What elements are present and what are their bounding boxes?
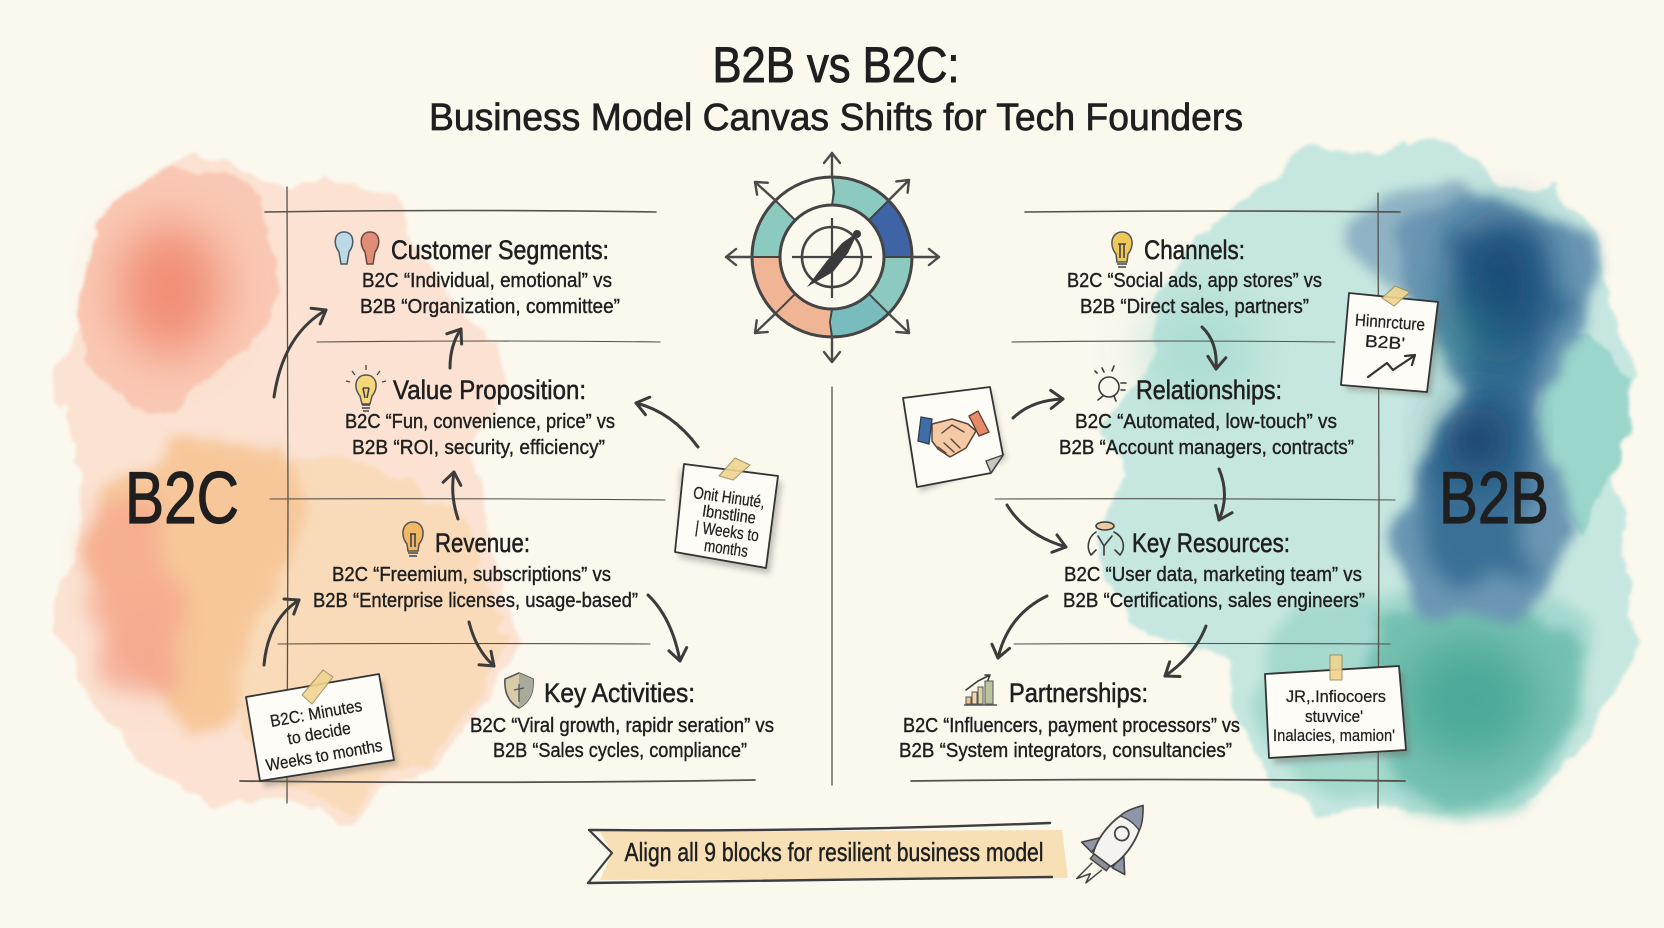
block: Partnerships: B2B “System integrators, consultancies” — [899, 739, 1232, 762]
block: Key Activities: B2C “Viral growth, rapidr seration” vs — [470, 714, 774, 737]
title: Business Model Canvas Shifts for Tech Founders — [429, 97, 1243, 139]
block: Key Activities: Key Activities: — [544, 678, 695, 708]
banner — [588, 823, 1068, 883]
block: Partnerships: B2C “Influencers, payment processors” vs — [903, 714, 1240, 737]
block: Customer Segments: B2B “Organization, committee” — [360, 295, 620, 318]
sticky note: garbled partnerships: JR,.Infiocoers — [1286, 687, 1386, 706]
block: Value Proposition: Value Proposition: — [393, 375, 586, 405]
flow arrows — [264, 310, 1224, 676]
icon: rocket — [1062, 789, 1164, 900]
icon: shield — [505, 673, 533, 708]
icon: yellow light bulb — [1112, 232, 1132, 267]
sticky note: handshake — [903, 387, 1006, 492]
icon: handshake — [918, 411, 989, 457]
icon: sketched team figures — [1088, 522, 1123, 555]
block: Revenue: B2C “Freemium, subscriptions” vs — [332, 563, 611, 586]
title — [429, 37, 1243, 139]
icon: sketched bulb with sparks — [1095, 366, 1126, 401]
block: Relationships: B2B “Account managers, contracts” — [1059, 436, 1354, 459]
block: Revenue: B2B “Enterprise licenses, usage-based” — [313, 589, 638, 612]
block: Relationships — [1059, 366, 1354, 459]
block: Channels: B2B “Direct sales, partners” — [1080, 295, 1309, 318]
block: Relationships: B2C “Automated, low-touch” vs — [1075, 410, 1337, 433]
block: Key Resources: Key Resources: — [1132, 528, 1290, 558]
block: Channels — [1067, 232, 1322, 318]
icon: amber light bulb — [403, 522, 423, 556]
sticky note: garbled partnerships: Inalacies, mamion' — [1273, 726, 1395, 745]
block: Key Resources: B2C “User data, marketing team” vs — [1064, 563, 1362, 586]
canvas grid lines — [240, 187, 1405, 808]
label: B2C: B2C — [125, 458, 239, 539]
sticky note: garbled sales cycle: Ibnstline — [701, 501, 757, 528]
block: Relationships: Relationships: — [1136, 375, 1282, 405]
block: Value Proposition: B2B “ROI, security, efficiency” — [352, 436, 605, 459]
block: Revenue: Revenue: — [435, 528, 530, 558]
sticky note: garbled sales cycle: Onit Hinuté, — [692, 483, 766, 512]
block: Channels: B2C “Social ads, app stores” vs — [1067, 269, 1322, 292]
block: Partnerships — [899, 675, 1240, 762]
sticky note: B2B chart: Hinnrcture — [1354, 311, 1426, 334]
block: Partnerships: Partnerships: — [1009, 678, 1148, 708]
label: B2B: B2B — [1439, 458, 1549, 539]
sticky note: B2B chart: B2B' — [1364, 332, 1406, 353]
block: Key Resources: B2B “Certifications, sales engineers” — [1063, 589, 1365, 612]
block: Customer Segments: Customer Segments: — [391, 235, 609, 265]
sticky note: garbled sales cycle — [675, 458, 782, 574]
sticky note: B2C minutes to decide: to decide — [286, 719, 352, 748]
icon: rising trend arrow — [1368, 355, 1415, 377]
sticky note: B2B chart — [1341, 286, 1442, 396]
sticky note: garbled partnerships — [1265, 655, 1411, 764]
block: Revenue — [313, 522, 638, 612]
icon: bar chart with arrow — [964, 675, 997, 705]
sticky note: garbled sales cycle: | Weeks to — [694, 518, 760, 545]
sticky note: garbled sales cycle: months — [703, 536, 749, 561]
block: Key Activities: B2B “Sales cycles, compliance” — [493, 739, 747, 762]
sticky note: B2C minutes to decide: Weeks to months — [264, 736, 384, 775]
sticky note: garbled partnerships: stuvvice' — [1305, 707, 1363, 726]
watercolor wash: B2C warm side — [48, 148, 510, 815]
icon: glowing light bulb — [346, 365, 386, 411]
sticky note: B2C minutes to decide — [246, 670, 398, 787]
block: Customer Segments — [335, 232, 620, 318]
compass wheel — [726, 153, 939, 362]
block: Value Proposition — [345, 365, 615, 459]
block: Customer Segments: B2C “Individual, emotional” vs — [362, 269, 612, 292]
banner: Align all 9 blocks for resilient business model — [624, 837, 1044, 867]
block: Key Activities — [470, 673, 774, 762]
block: Value Proposition: B2C “Fun, convenience, price” vs — [345, 410, 615, 433]
sticky note: B2C minutes to decide: B2C: Minutes — [269, 696, 364, 731]
icon: blue and red bulbs — [335, 232, 379, 264]
watercolor wash: B2B cool side — [1095, 147, 1636, 820]
block: Key Resources — [1063, 522, 1365, 612]
block: Channels: Channels: — [1144, 235, 1245, 265]
title: B2B vs B2C: — [712, 37, 960, 93]
